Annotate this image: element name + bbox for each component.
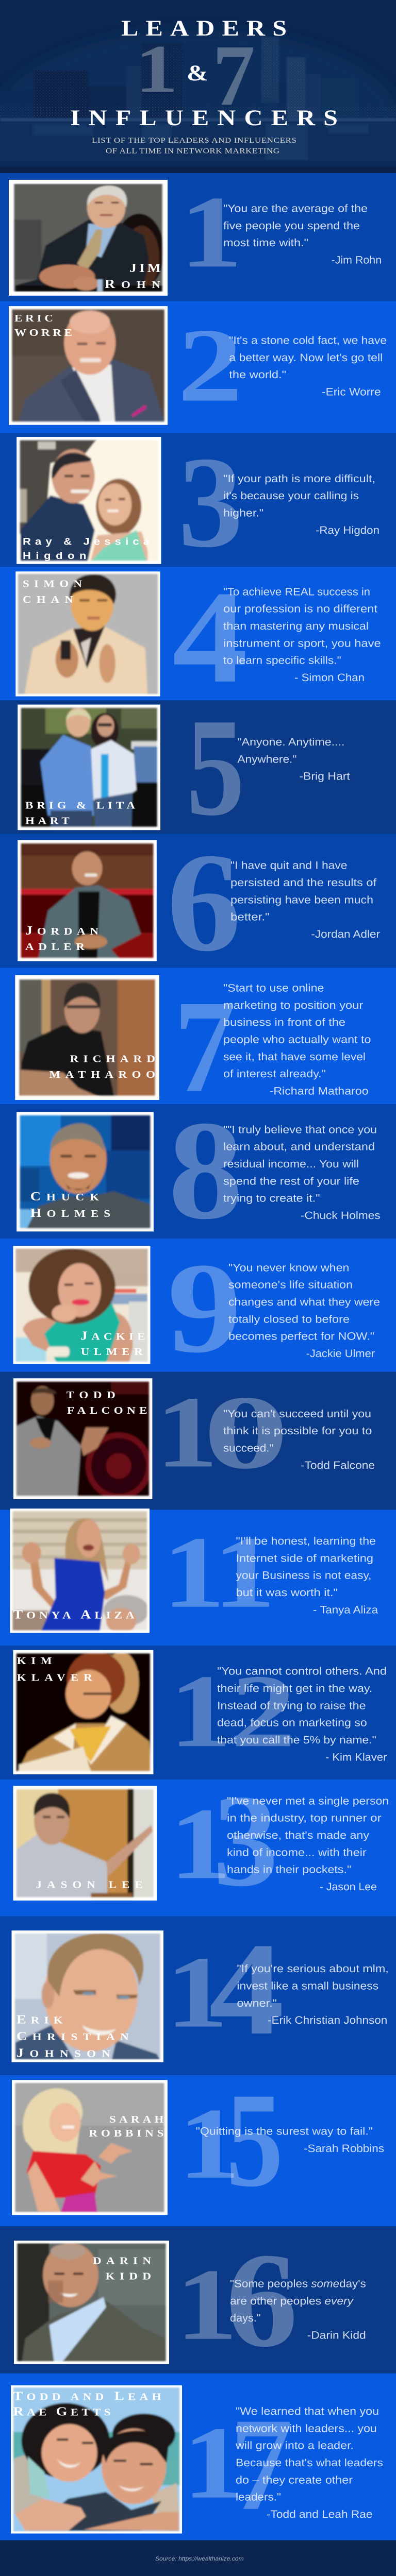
quote: leaders." [236, 2491, 281, 2503]
quote [223, 1408, 375, 1471]
quote: -Sarah Robbins [304, 2143, 384, 2155]
number 10: 1 [156, 1376, 218, 1489]
photo: Darin Kidd [14, 2241, 169, 2364]
quote: the world." [229, 369, 286, 381]
name label: Higdon [23, 550, 87, 562]
quote: - Simon Chan [294, 672, 365, 684]
panel 5: Brig Hart [0, 690, 396, 845]
quote: residual income... You will [223, 1158, 359, 1170]
name label [25, 800, 135, 826]
quote: owner." [237, 1997, 277, 2009]
quote: to learn specific skills." [223, 654, 341, 667]
quote: your Business is not easy, [236, 1569, 371, 1582]
name label: C HUCK [30, 1190, 99, 1203]
quote: are other peoples every [230, 2295, 354, 2307]
quote: than mastering any musical [223, 620, 369, 632]
quote [228, 1262, 380, 1360]
quote [227, 1795, 389, 1893]
quote [196, 2125, 384, 2155]
photo: Kim Klaver [13, 1650, 153, 1774]
quote: -Jackie Ulmer [306, 1348, 375, 1360]
quote: succeed." [223, 1442, 273, 1454]
big number 1 behind title: 1 [135, 31, 178, 107]
name label: SARAH [109, 2113, 164, 2125]
name label [14, 313, 72, 338]
name label: CHAN [23, 594, 73, 605]
panel 7: Richard Matharoo [0, 968, 396, 1120]
photo: Sarah Robbins [12, 2080, 168, 2215]
quote [223, 1124, 381, 1222]
quote: -Eric Worre [322, 386, 381, 398]
quote: Anywhere." [237, 753, 296, 766]
name label: MATHAROO [50, 1069, 155, 1080]
photo: Jackie Ulmer [13, 1246, 150, 1364]
quote [223, 202, 382, 266]
quote: "It's a stone cold fact, we have [229, 334, 387, 347]
quote: that you call the 5% by name." [217, 1734, 376, 1746]
name label [16, 2012, 129, 2060]
quote: - Tanya Aliza [313, 1604, 378, 1616]
number 15: 5 [226, 2064, 283, 2215]
quote: kind of income... with their [227, 1846, 367, 1858]
number 5: 5 [186, 690, 244, 845]
name label: JASON LEE [36, 1879, 143, 1890]
name label [17, 1655, 92, 1683]
number 16 [175, 2225, 298, 2375]
quote: network with leaders... you [236, 2422, 377, 2435]
quote: it's because your calling is [223, 490, 359, 502]
quote: our profession is no different [223, 603, 377, 615]
quote: persisting have been much [230, 894, 373, 906]
subtitle: OF ALL TIME IN NETWORK MARKETING [106, 147, 279, 155]
panel 11: Tanya Aliza [0, 1509, 396, 1646]
quote: do – they create other [236, 2474, 353, 2486]
number 12: 2 [230, 1653, 296, 1769]
quote: five people you spend the [223, 220, 360, 232]
quote: ""I truly believe that once you [223, 1124, 377, 1136]
photo: Jordan Adler [18, 840, 157, 961]
photo: Tanya Aliza [10, 1509, 150, 1634]
photo: Chuck Holmes [16, 1112, 154, 1231]
title: & [187, 61, 208, 86]
subtitle: LIST OF THE TOP LEADERS AND INFLUENCERS [92, 137, 296, 145]
number 11 [162, 1516, 275, 1630]
quote: "I have quit and I have [230, 859, 348, 872]
name label: T ODD AND L EAH [13, 2389, 161, 2403]
name label [67, 1389, 147, 1416]
name label: DARIN [93, 2255, 151, 2266]
quote: trying to create it." [223, 1192, 320, 1205]
panel 4: Simon Chan [0, 563, 396, 710]
quote: in the industry, top runner or [227, 1812, 382, 1824]
name label: KIDD [106, 2270, 151, 2282]
name label [30, 1190, 110, 1220]
photo: Todd and Leah Rae Getts [11, 2385, 182, 2534]
panel 6: Jordan Adler [0, 824, 396, 980]
name label: BRIG & LITA [25, 800, 135, 811]
subtitle [92, 137, 296, 155]
number 17 [183, 2391, 293, 2538]
quote [236, 1535, 378, 1616]
photo: Ray and Jessica Higdon [16, 437, 161, 564]
photo: Simon Chan [15, 571, 160, 697]
quote: Internet side of marketing [236, 1552, 373, 1565]
big number 7 behind title: 7 [212, 27, 255, 124]
quote [237, 736, 350, 783]
quote: "If you're serious about mlm, [237, 1963, 389, 1975]
quote: of interest already." [223, 1068, 326, 1080]
quote: "Start to use online [223, 982, 324, 994]
photo: Eric Worre [9, 306, 168, 425]
panel 12: Kim Klaver [0, 1646, 396, 1780]
number 15 [178, 2064, 283, 2215]
number 17: 1 [183, 2405, 244, 2520]
name label: J ORDAN [25, 924, 98, 938]
panel 14: Erik Christian Johnson [0, 1916, 396, 2075]
quote [223, 586, 381, 684]
quote: will grow into a leader. [235, 2439, 354, 2452]
title [70, 16, 338, 130]
quote: "Quitting is the surest way to fail." [196, 2125, 373, 2138]
quote [223, 473, 380, 536]
name label: C HRISTIAN [16, 2029, 129, 2043]
quote: people who actually want to [223, 1033, 371, 1046]
quote [237, 1963, 389, 2026]
name label: J ACKIE [80, 1329, 145, 1343]
number 13: 1 [169, 1787, 232, 1901]
footer [0, 2540, 396, 2576]
quote: -Brig Hart [299, 770, 350, 783]
quote: - Kim Klaver [325, 1751, 387, 1764]
quote [229, 334, 387, 398]
quote: -Darin Kidd [307, 2329, 366, 2342]
number 3: 3 [178, 429, 243, 574]
panel 10: Todd Falcone [0, 1372, 396, 1510]
name label: ADLER [25, 941, 85, 953]
quote [230, 2278, 366, 2342]
name label: Ray & Jessica [23, 536, 150, 547]
name label [50, 1053, 155, 1080]
name label: E RIK [16, 2012, 63, 2026]
name label: ROBBINS [89, 2128, 163, 2139]
quote: -Chuck Holmes [301, 1210, 381, 1222]
number 13: 3 [213, 1768, 278, 1914]
name label: RICHARD [70, 1053, 155, 1064]
quote: marketing to position your [223, 999, 363, 1011]
number 14 [166, 1916, 284, 2062]
number 11: 1 [213, 1516, 275, 1630]
name label: J OHNSON [16, 2046, 110, 2060]
quote: most time with." [223, 237, 308, 249]
name label: TODD [67, 1389, 116, 1401]
quote: -Ray Higdon [316, 524, 380, 536]
number 16: 1 [175, 2247, 238, 2361]
number 14: 1 [166, 1936, 228, 2049]
number 1: 1 [179, 175, 243, 289]
name label: H OLMES [30, 1206, 110, 1220]
number 9: 9 [168, 1236, 241, 1380]
photo: Jim Rohn [9, 180, 168, 296]
name label: FALCONE [67, 1404, 147, 1416]
quote: dead, focus on marketing so [217, 1717, 367, 1729]
name label: JIM [129, 261, 161, 275]
number 4: 4 [172, 563, 248, 710]
number 12 [169, 1653, 296, 1769]
name label: HART [25, 815, 70, 826]
quote: totally closed to before [228, 1313, 350, 1326]
panel 1: Jim Rohn [0, 173, 396, 301]
quote: "Anyone. Anytime.... [237, 736, 344, 748]
number 14: 4 [209, 1916, 284, 2062]
name label: T ONYA A LIZA [13, 1607, 135, 1621]
name label: ERIC [14, 313, 53, 324]
name label: SIMON [23, 578, 82, 589]
name label: KLAVER [17, 1672, 92, 1683]
panel 8: Chuck Holmes [0, 1092, 396, 1249]
name label [80, 1329, 145, 1358]
quote: but it was worth it." [236, 1587, 338, 1599]
name label: KIM [17, 1655, 52, 1666]
panel 3: Ray Higdon [0, 429, 396, 574]
photo: Jason Lee [13, 1786, 157, 1901]
quote: "You can't succeed until you [223, 1408, 371, 1420]
quote: learn about, and understand [223, 1141, 375, 1153]
number 16: 6 [226, 2225, 298, 2375]
title: LEADERS [121, 16, 287, 41]
number 8: 8 [168, 1092, 243, 1249]
panel 9: Jackie Ulmer [0, 1236, 396, 1380]
quote: see it, that have some level [223, 1051, 366, 1063]
panel 2: Eric Worre [0, 301, 396, 433]
name label [105, 261, 161, 291]
number 10: 0 [203, 1374, 289, 1490]
name label [25, 924, 98, 953]
number 2: 2 [177, 307, 243, 423]
quote: hands in their pockets." [227, 1863, 351, 1876]
header panel [0, 0, 396, 218]
quote: - Jason Lee [320, 1881, 377, 1893]
header background skyline [0, 33, 396, 167]
quote: becomes perfect for NOW." [228, 1330, 374, 1343]
quote: higher." [223, 507, 263, 519]
quote: -Todd Falcone [301, 1460, 375, 1471]
quote: invest like a small business [237, 1980, 378, 1992]
quote: someone's life situation [228, 1279, 353, 1291]
name label: R OHN [105, 277, 160, 291]
quote: instrument or sport, you have [223, 637, 381, 650]
quote: Because that's what leaders [236, 2457, 383, 2469]
quote [235, 2405, 383, 2520]
quote: days." [230, 2312, 261, 2324]
number 15: 1 [178, 2087, 240, 2200]
quote [217, 1665, 387, 1764]
panel 16: Darin Kidd [0, 2225, 396, 2375]
quote: -Richard Matharoo [270, 1085, 369, 1097]
photo: Richard Matharoo [15, 975, 159, 1100]
number 6: 6 [167, 824, 241, 980]
panel 13: Jason Lee [0, 1768, 396, 1917]
name label [89, 2113, 164, 2139]
panel 17: Todd and Leah Rae Getts [0, 2374, 396, 2540]
quote: -Todd and Leah Rae [267, 2509, 372, 2520]
quote: changes and what they were [228, 1296, 380, 1308]
quote: spend the rest of your life [223, 1175, 359, 1188]
name label: ULMER [81, 1346, 143, 1358]
quote: better." [230, 911, 270, 923]
name label: R AE G ETTS [13, 2404, 111, 2418]
quote: "Some peoples someday's [230, 2278, 366, 2290]
quote: "You cannot control others. And [217, 1665, 387, 1677]
quote: "I'll be honest, learning the [236, 1535, 376, 1547]
quote: "We learned that when you [236, 2405, 379, 2417]
quote [230, 859, 380, 940]
photo: Brig and Lita Hart [18, 705, 160, 830]
name label [23, 578, 82, 605]
photo: Erik Christian Johnson [11, 1930, 163, 2062]
name label [23, 536, 150, 562]
quote: their life might get in the way. [217, 1683, 372, 1694]
number 17: 7 [230, 2391, 293, 2538]
quote: business in front of the [223, 1016, 345, 1028]
quote: otherwise, that's made any [227, 1829, 369, 1841]
name label: WORRE [14, 327, 72, 338]
quote: "I've never met a single person [227, 1795, 389, 1807]
title: INFLUENCERS [70, 106, 338, 130]
divider band [0, 167, 396, 174]
number 7: 7 [174, 973, 235, 1120]
quote: -Erik Christian Johnson [268, 2014, 387, 2026]
quote [223, 982, 371, 1097]
quote: "To achieve REAL success in [223, 586, 370, 598]
panel 15: Sarah Robbins [0, 2064, 396, 2226]
quote: "You never know when [228, 1262, 349, 1274]
source line: Source: https://wealthanize.com [155, 2555, 244, 2562]
quote: persisted and the results of [230, 877, 376, 889]
quote: a better way. Now let's go tell [229, 352, 383, 364]
number 10 [156, 1374, 289, 1490]
number 11: 1 [162, 1516, 225, 1630]
photo: Todd Falcone [13, 1378, 152, 1499]
quote: think it is possible for you to [223, 1425, 372, 1437]
number 13 [169, 1768, 278, 1914]
quote: Instead of trying to raise the [217, 1700, 366, 1712]
quote: "You are the average of the [223, 202, 368, 215]
number 12: 1 [169, 1653, 232, 1769]
name label [93, 2255, 151, 2282]
quote: "If your path is more difficult, [223, 473, 375, 485]
name label [13, 2389, 161, 2418]
quote: -Jim Rohn [332, 254, 382, 266]
quote: -Jordan Adler [311, 928, 380, 940]
